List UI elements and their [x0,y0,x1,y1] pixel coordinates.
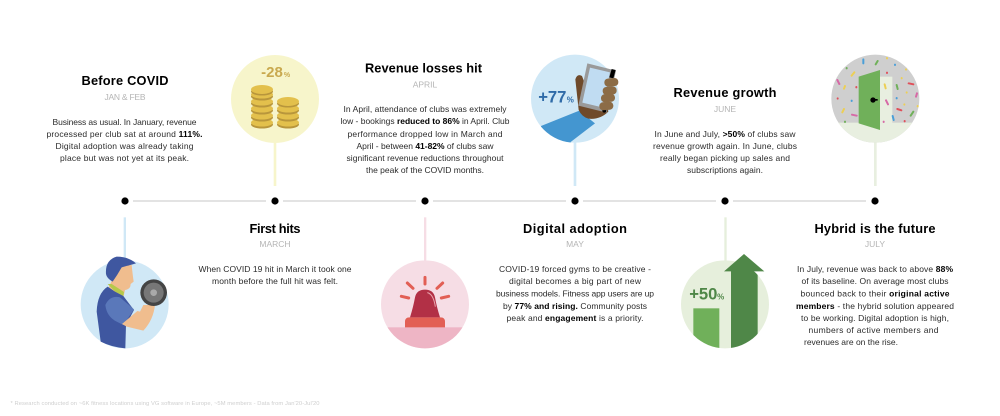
panel: digital adoption: by 77% and rising. Community posts [503,301,647,311]
timeline axis [121,197,879,205]
icon: alarm siren [381,217,469,351]
icon: door with confetti [831,55,919,186]
panel: before covid: processed per club sat at around 111%. [46,129,202,139]
panel: before covid: Before COVID [82,73,168,88]
panel: before covid: place but was not yet at its peak. [60,153,189,163]
panel: digital adoption: business models. Fitness app users are up [496,288,654,298]
footnote: * Research conducted on ~6K fitness locations using VG software in Europe, ~5M members - Data from Jan'20-Jul'20 [10,401,320,407]
icon: coins: % [284,72,291,79]
panel: revenue losses hit: low - bookings reduced to 86% in April. Club [340,116,510,126]
panel: digital adoption: COVID-19 forced gyms to be creative - [499,264,651,274]
icon: coins: -28 [261,64,283,81]
panel: revenue losses hit: April - between 41-82% of clubs saw [356,141,494,151]
panel: digital adoption: MAY [566,239,584,249]
panel: hybrid is the future: numbers of active members and [808,325,939,335]
icon: phone in hand [531,55,619,186]
panel: revenue growth: In June and July, >50% of clubs saw [654,129,796,139]
panel: revenue growth: JUNE [714,104,736,114]
panel: revenue growth: Revenue growth [674,85,777,100]
panel: before covid: Digital adoption was already taking [56,141,194,151]
panel: revenue growth: revenue growth again. In June, clubs [653,141,797,151]
panel: hybrid is the future: to be working. Digital adoption is high, [801,313,949,323]
icon: growth arrow [681,217,769,350]
panel: before covid: JAN & FEB [104,92,146,102]
panel: hybrid is the future [796,221,954,347]
panel: revenue losses hit: Revenue losses hit [365,60,483,76]
panel: digital adoption [496,221,654,323]
panel: revenue growth: subscriptions again. [687,165,763,175]
icon: phone in hand: % [567,95,574,104]
panel: digital adoption: digital becomes a big part of new [509,276,642,286]
panel: hybrid is the future: Hybrid is the future [814,221,936,236]
icon: growth arrow: % [717,292,724,301]
icon: man lifting dumbbell [81,217,169,348]
icon: coins [231,55,319,186]
panel: hybrid is the future: members - the hybrid solution appeared [796,301,954,311]
panel: first hits [198,221,352,286]
panel: first hits: MARCH [259,239,291,249]
panel: revenue losses hit: performance dropped low in March and [348,129,503,139]
panel: hybrid is the future: revenues are on the rise. [804,337,898,347]
panel: digital adoption: peak and engagement is a priority. [506,313,644,323]
panel: before covid: Business as usual. In January, revenue [52,117,197,127]
panel: hybrid is the future: bounced back to their original active [800,288,950,298]
panel: hybrid is the future: of its baseline. On average most clubs [802,276,948,286]
panel: revenue losses hit [340,60,510,175]
icon: growth arrow: +50 [689,284,717,303]
panel: revenue losses hit: significant revenue reductions throughout [346,153,504,163]
panel: hybrid is the future: JULY [865,239,885,249]
panel: revenue growth [653,85,797,175]
panel: revenue losses hit: APRIL [413,80,438,90]
icon: phone in hand: +77 [538,87,566,106]
panel: first hits: month before the full hit was felt. [212,276,338,286]
panel: hybrid is the future: In July, revenue was back to above 88% [797,264,953,274]
panel: first hits: When COVID 19 hit in March it took one [198,264,352,274]
panel: revenue losses hit: the peak of the COVID months. [366,165,484,175]
panel: first hits: First hits [250,221,300,236]
infographic: timeline [10,54,954,406]
panel: digital adoption: Digital adoption [523,221,627,236]
panel: revenue losses hit: In April, attendance of clubs was extremely [344,104,507,114]
panel: before covid [46,73,202,163]
panel: revenue growth: really began picking up sales and [660,153,790,163]
